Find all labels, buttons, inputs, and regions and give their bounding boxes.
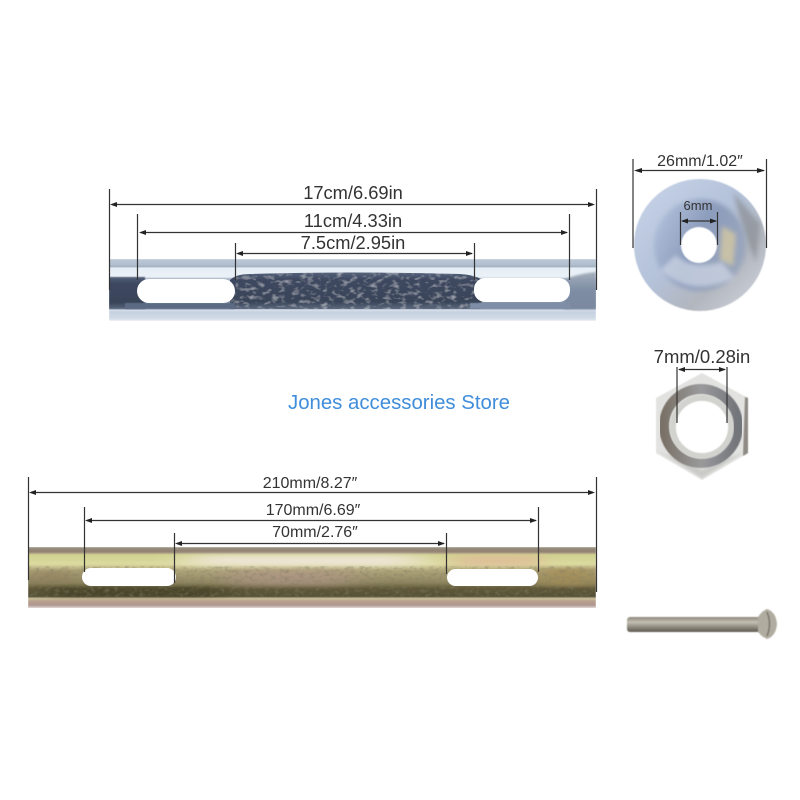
rail slot left <box>82 568 176 586</box>
panel: hex nut <box>654 346 750 480</box>
dimension: 70mm/2.76": 70mm/2.76″ <box>272 524 358 541</box>
icon: screw <box>627 609 777 639</box>
dimension: 70mm/2.76" <box>174 524 446 583</box>
dimension: 210mm/8.27" <box>28 475 596 592</box>
dimension: 7.5cm/2.95in <box>236 232 474 280</box>
rail slot right <box>474 278 570 302</box>
dimension: 26mm/1.02": 26mm/1.02″ <box>657 153 743 170</box>
dimension: 17cm/6.69in <box>110 182 596 290</box>
dimension: 11cm/4.33in: 11cm/4.33in <box>304 210 402 231</box>
dimension: 6mm <box>680 198 718 245</box>
store name: Jones accessories Store <box>288 392 510 414</box>
dimension: 170mm/6.69": 170mm/6.69″ <box>266 502 361 519</box>
dimension: 7mm/0.28in: 7mm/0.28in <box>654 346 750 367</box>
dimension: 26mm/1.02" <box>633 153 766 248</box>
dimension: 210mm/8.27": 210mm/8.27″ <box>263 475 358 492</box>
panel: silver rail with dimensions <box>109 182 596 321</box>
infographic canvas <box>28 154 778 640</box>
panel: washer <box>633 153 766 311</box>
silver rail body <box>109 259 596 321</box>
washer disc <box>634 179 766 311</box>
dimension: 7.5cm/2.95in: 7.5cm/2.95in <box>301 232 405 253</box>
dimension: 17cm/6.69in: 17cm/6.69in <box>303 182 403 203</box>
panel: gold rail with dimensions <box>28 475 596 608</box>
dimension: 11cm/4.33in <box>138 210 570 280</box>
hex nut body <box>656 373 748 480</box>
dimension: 6mm: 6mm <box>684 198 712 213</box>
rail slot left <box>137 279 235 303</box>
dimension: 170mm/6.69" <box>84 502 538 572</box>
gold rail body <box>28 547 596 608</box>
rail slot right <box>447 569 538 586</box>
